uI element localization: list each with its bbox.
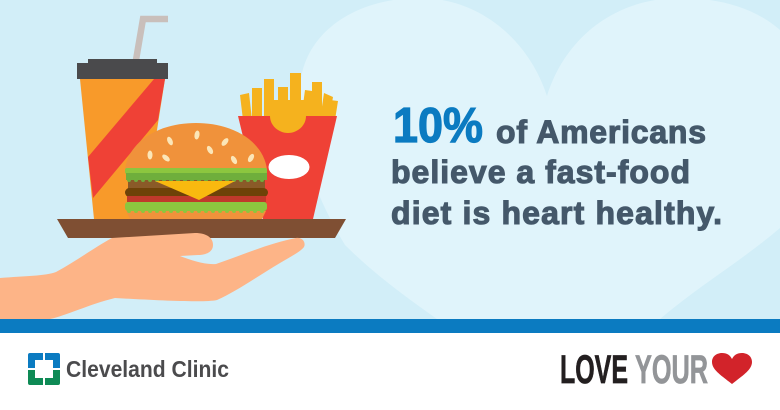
- icon: straw: [136, 19, 168, 60]
- headline line 3: diet is heart healthy.: [391, 195, 722, 231]
- tray: [57, 219, 346, 238]
- Cleveland Clinic logo: [28, 353, 229, 385]
- footer panel: [0, 333, 780, 410]
- headline statistic: [391, 99, 722, 231]
- icon: Cleveland Clinic cross: [28, 353, 60, 385]
- wordmark: Cleveland Clinic: [66, 356, 229, 382]
- LOVE: LOVE: [560, 348, 628, 392]
- icon: hamburger: [125, 123, 268, 219]
- icon: red heart: [712, 353, 752, 384]
- YOUR: YOUR: [635, 348, 708, 392]
- headline line 1: of Americans: [496, 114, 706, 150]
- Love Your Heart logo: [560, 348, 752, 392]
- icon: french fries: [238, 73, 338, 219]
- blue divider band: [0, 319, 780, 333]
- icon: hand holding tray: [0, 233, 305, 319]
- background heart: [300, 0, 780, 319]
- headline line 2: believe a fast-food: [391, 154, 690, 190]
- illustration: fast food on tray: [57, 19, 346, 238]
- panel: sky background: [0, 0, 780, 319]
- 10 percent figure: 10%: [393, 99, 483, 153]
- icon: drink cup: [77, 59, 168, 219]
